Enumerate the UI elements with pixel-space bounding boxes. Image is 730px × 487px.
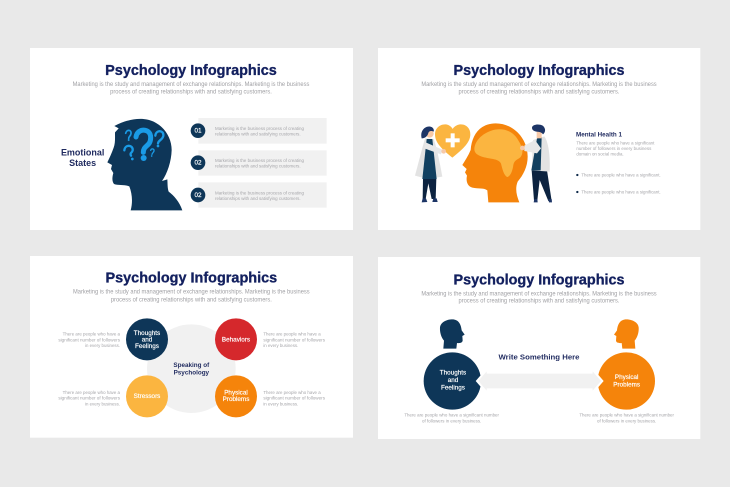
title: Psychology Infographics: [105, 62, 277, 79]
bullet 2: There are people who have a significant.: [581, 190, 661, 196]
text bottom right: [263, 390, 325, 407]
subtitle: Marketing is the study and management of exchange relationships. Marketing is the business: [421, 82, 657, 88]
circle: thoughts and feelings: and: [448, 377, 459, 384]
circle: thoughts and feelings: [424, 352, 481, 410]
center label: Psychology: [174, 370, 210, 377]
subtitle: process of creating relationships with and satisfying customers.: [458, 299, 620, 305]
text right: [579, 413, 674, 424]
row 03: 02: [194, 192, 202, 199]
row 01: 01: [194, 128, 202, 135]
row 02: Marketing is the business process of creating: [215, 158, 304, 164]
text left: of followers in every business.: [422, 418, 481, 424]
text top right: in every business.: [263, 343, 298, 349]
center circle: [147, 324, 236, 413]
circle: thoughts and feelings: and: [142, 337, 153, 344]
text top left: There are people who have a: [63, 332, 120, 338]
title: Psychology Infographics: [105, 270, 277, 287]
text top right: [263, 332, 325, 349]
subtitle: [73, 82, 309, 96]
arrow: double headed: [477, 369, 602, 393]
circle: physical problems: Physical: [224, 390, 248, 397]
label: emotional states: Emotional: [61, 147, 104, 157]
circle: thoughts and feelings: Feelings: [441, 384, 465, 391]
text bottom left: in every business.: [85, 401, 120, 407]
text bottom right: There are people who have a: [263, 390, 321, 396]
icon: navy head: [440, 319, 465, 349]
icon: heart with plus: [435, 124, 470, 158]
text bottom left: [58, 390, 120, 407]
text bottom left: significant number of followers: [58, 396, 120, 402]
text top right: There are people who have a: [263, 332, 321, 338]
circle: thoughts and feelings: Thoughts: [440, 370, 466, 377]
icon: man doctor: [520, 125, 552, 202]
subtitle: [73, 290, 310, 303]
heading: mental health 1: Mental Health 1: [576, 131, 622, 138]
circle: behaviors: [215, 318, 257, 360]
icon: head silhouette with question marks: [107, 119, 182, 210]
subtitle: process of creating relationships with and satisfying customers.: [110, 90, 272, 96]
center label: Speaking of: [173, 362, 210, 369]
text top left: [58, 332, 120, 349]
icon: orange head: [614, 319, 639, 349]
text top left: in every business.: [85, 343, 120, 349]
text top left: significant number of followers: [58, 337, 120, 343]
label: emotional states: States: [69, 158, 96, 168]
text block: number of followers in every business: [576, 146, 652, 152]
row 01: [191, 118, 327, 144]
subtitle: Marketing is the study and management of exchange relationships. Marketing is the business: [421, 291, 657, 297]
text left: There are people who have a significant number: [404, 413, 499, 419]
title: Psychology Infographics: [453, 271, 624, 288]
text bottom left: There are people who have a: [63, 390, 120, 396]
icon: orange head with brain: [462, 123, 528, 202]
subtitle: Marketing is the study and management of exchange relationships. Marketing is the business: [73, 290, 310, 296]
text left: [404, 413, 499, 424]
heading: write something here: Write Something Here: [498, 352, 579, 361]
row 01: relationships with and satisfying customers.: [215, 132, 301, 138]
circle: physical problems: Problems: [613, 381, 640, 388]
text top right: significant number of followers: [263, 337, 325, 343]
subtitle: Marketing is the study and management of exchange relationships. Marketing is the business: [73, 82, 309, 88]
row 02: relationships with and satisfying customers.: [215, 164, 301, 170]
text block: There are people who have a significant: [576, 140, 655, 146]
panel: emotional states: [30, 48, 353, 230]
text block: [576, 140, 655, 158]
title: Psychology Infographics: [453, 62, 624, 79]
panel: mental health: [378, 48, 700, 230]
row 02: [191, 150, 327, 176]
circle: physical problems: [215, 375, 257, 417]
circle: stressors: Stressors: [134, 393, 160, 400]
subtitle: process of creating relationships with and satisfying customers.: [458, 90, 620, 96]
panel: comparison: [378, 257, 700, 439]
row 01: Marketing is the business process of creating: [215, 126, 304, 132]
text right: There are people who have a significant number: [579, 413, 674, 419]
text bottom right: in every business.: [263, 401, 298, 407]
text block: domain on social media.: [576, 152, 624, 158]
text bottom right: significant number of followers: [263, 396, 325, 402]
subtitle: process of creating relationships with and satisfying customers.: [111, 297, 272, 303]
subtitle: [421, 82, 657, 96]
row 03: relationships with and satisfying customers.: [215, 196, 301, 202]
panel: speaking of psychology: [30, 256, 353, 438]
subtitle: [421, 291, 657, 305]
row 03: Marketing is the business process of creating: [215, 190, 304, 196]
circle: behaviors: Behaviors: [222, 336, 250, 343]
circle: physical problems: [598, 352, 655, 410]
circle: thoughts and feelings: Thoughts: [134, 330, 160, 337]
circle: physical problems: Problems: [223, 396, 249, 403]
circle: thoughts and feelings: [126, 318, 168, 360]
row 03: [191, 182, 327, 208]
bullet 1: There are people who have a significant.: [581, 173, 661, 179]
row 02: 02: [194, 160, 202, 167]
circle: physical problems: Physical: [615, 374, 638, 381]
circle: thoughts and feelings: Feelings: [135, 343, 159, 350]
circle: stressors: [126, 375, 168, 417]
text right: of followers in every business.: [597, 418, 656, 424]
icon: woman doctor: [415, 127, 446, 202]
